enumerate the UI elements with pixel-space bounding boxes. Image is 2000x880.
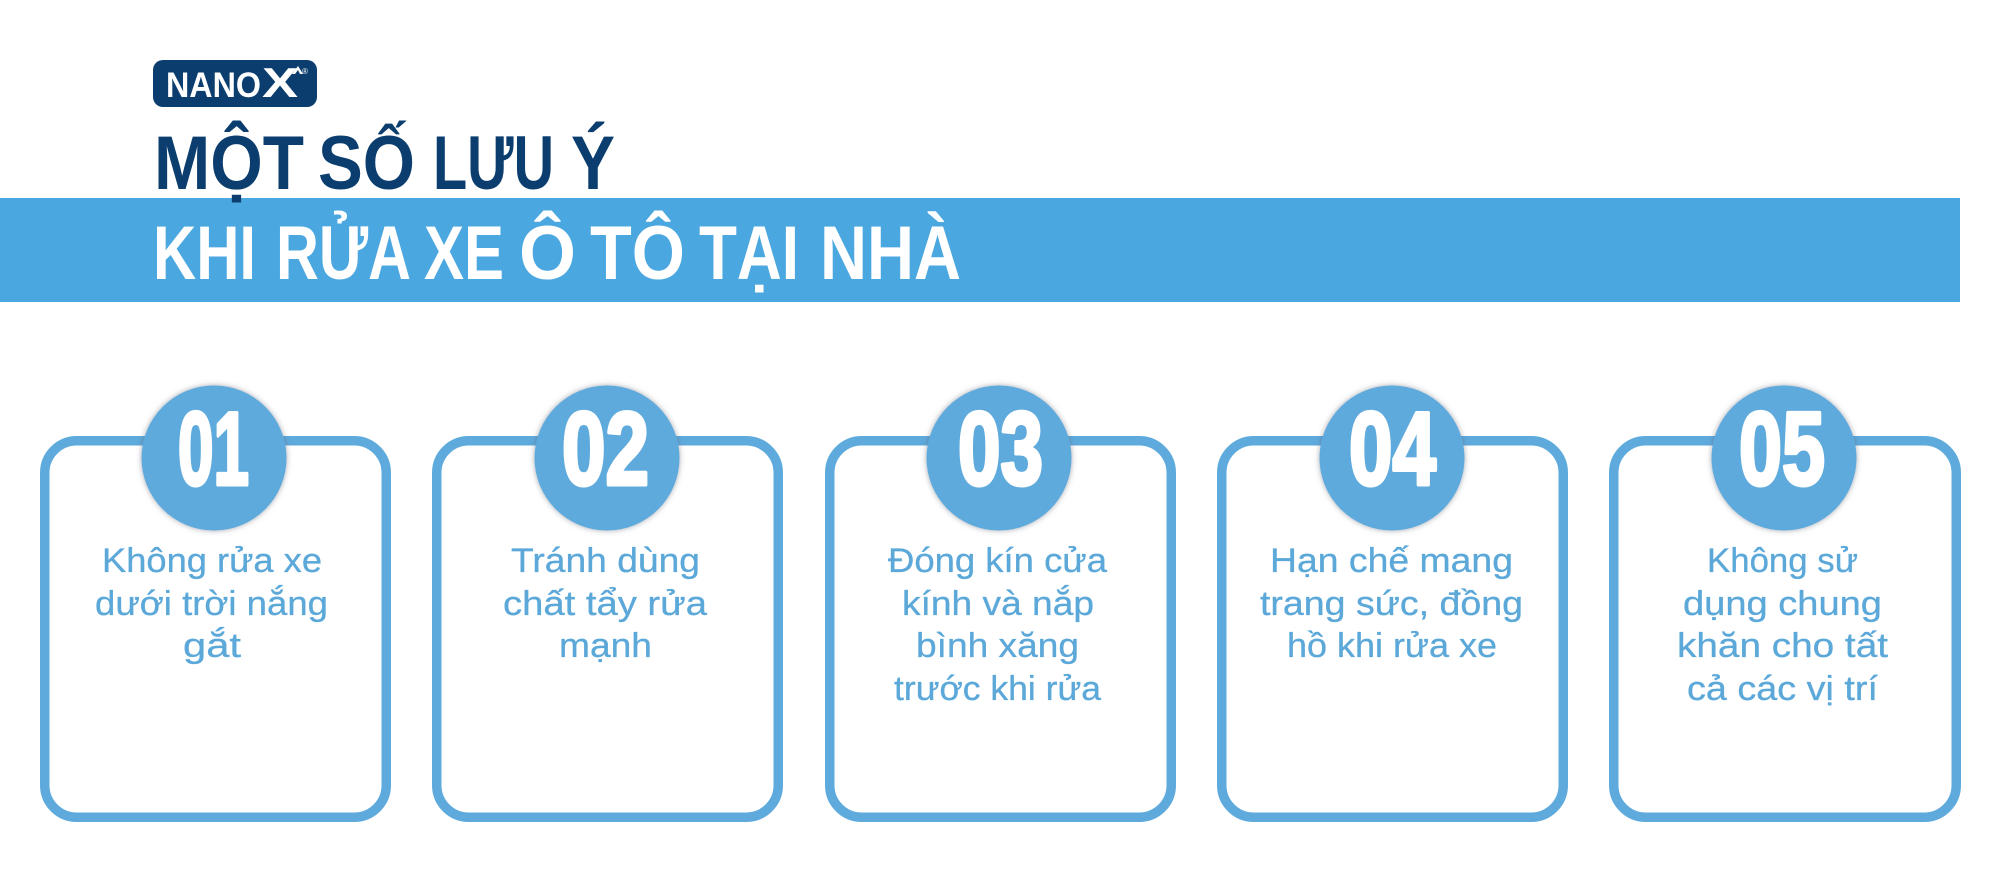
title line 2: TẠI: [699, 211, 799, 296]
text: card 04: Hạn chế mang: [1270, 542, 1513, 580]
text: card 05: [1677, 542, 1889, 708]
number 03: 03: [958, 392, 1043, 508]
number 04: 04: [1349, 392, 1436, 508]
text: card 01: dưới trời nắng: [95, 585, 328, 623]
text: card 02: Tránh dùng: [511, 542, 700, 580]
title line 1: Ý: [571, 121, 615, 206]
title line 1: SỐ: [318, 121, 415, 206]
text: card 02: chất tẩy rửa: [503, 585, 707, 623]
text: card 04: trang sức, đồng: [1260, 585, 1523, 623]
number 01: 01: [178, 392, 249, 508]
number 05: 05: [1739, 392, 1825, 508]
badge 02: [534, 386, 680, 530]
number 02: 02: [562, 392, 649, 508]
text: card 03: [888, 542, 1107, 708]
badge 01: [142, 386, 286, 530]
badge 04: [1320, 386, 1464, 530]
text: card 03: kính và nắp: [902, 585, 1094, 623]
title line 1: LƯU: [433, 121, 554, 206]
badge 03: [926, 386, 1072, 530]
text: card 03: trước khi rửa: [894, 670, 1101, 708]
logo: NanoX: X: [262, 59, 298, 106]
title line 2: NHÀ: [820, 211, 961, 296]
title line 1: [154, 121, 615, 206]
text: card 03: Đóng kín cửa: [888, 542, 1107, 580]
text: card 03: bình xăng: [916, 627, 1079, 665]
header banner: [0, 198, 1960, 302]
title line 2: XE: [424, 211, 504, 296]
panel: card 03: [830, 386, 1171, 817]
badge 05: [1712, 386, 1856, 530]
text: card 01: [95, 542, 328, 665]
title line 2: KHI: [153, 211, 256, 296]
panel: card 01: [45, 386, 386, 817]
panel: card 05: [1614, 386, 1956, 817]
title line 2: TÔ: [590, 211, 685, 296]
text: card 04: hồ khi rửa xe: [1287, 627, 1497, 665]
title line 2: Ô: [519, 211, 576, 296]
text: card 05: dụng chung: [1683, 585, 1882, 623]
title line 2: RỬA: [276, 211, 411, 296]
text: card 02: [503, 542, 707, 665]
text: card 02: mạnh: [559, 627, 652, 665]
text: card 05: cả các vị trí: [1687, 670, 1879, 708]
text: card 01: Không rửa xe: [102, 542, 322, 580]
title line 1: MỘT: [154, 121, 304, 206]
panel: card 02: [437, 386, 778, 817]
text: card 05: Không sử: [1707, 542, 1858, 580]
text: card 01: gắt: [183, 627, 242, 665]
logo: NanoX: NANO: [166, 66, 261, 105]
text: card 04: [1260, 542, 1523, 665]
text: card 05: khăn cho tất: [1677, 627, 1889, 665]
title line 2: [153, 211, 961, 296]
logo: NanoX: [153, 59, 317, 107]
panel: card 04: [1222, 386, 1563, 817]
logo: NanoX: ®: [302, 67, 308, 76]
